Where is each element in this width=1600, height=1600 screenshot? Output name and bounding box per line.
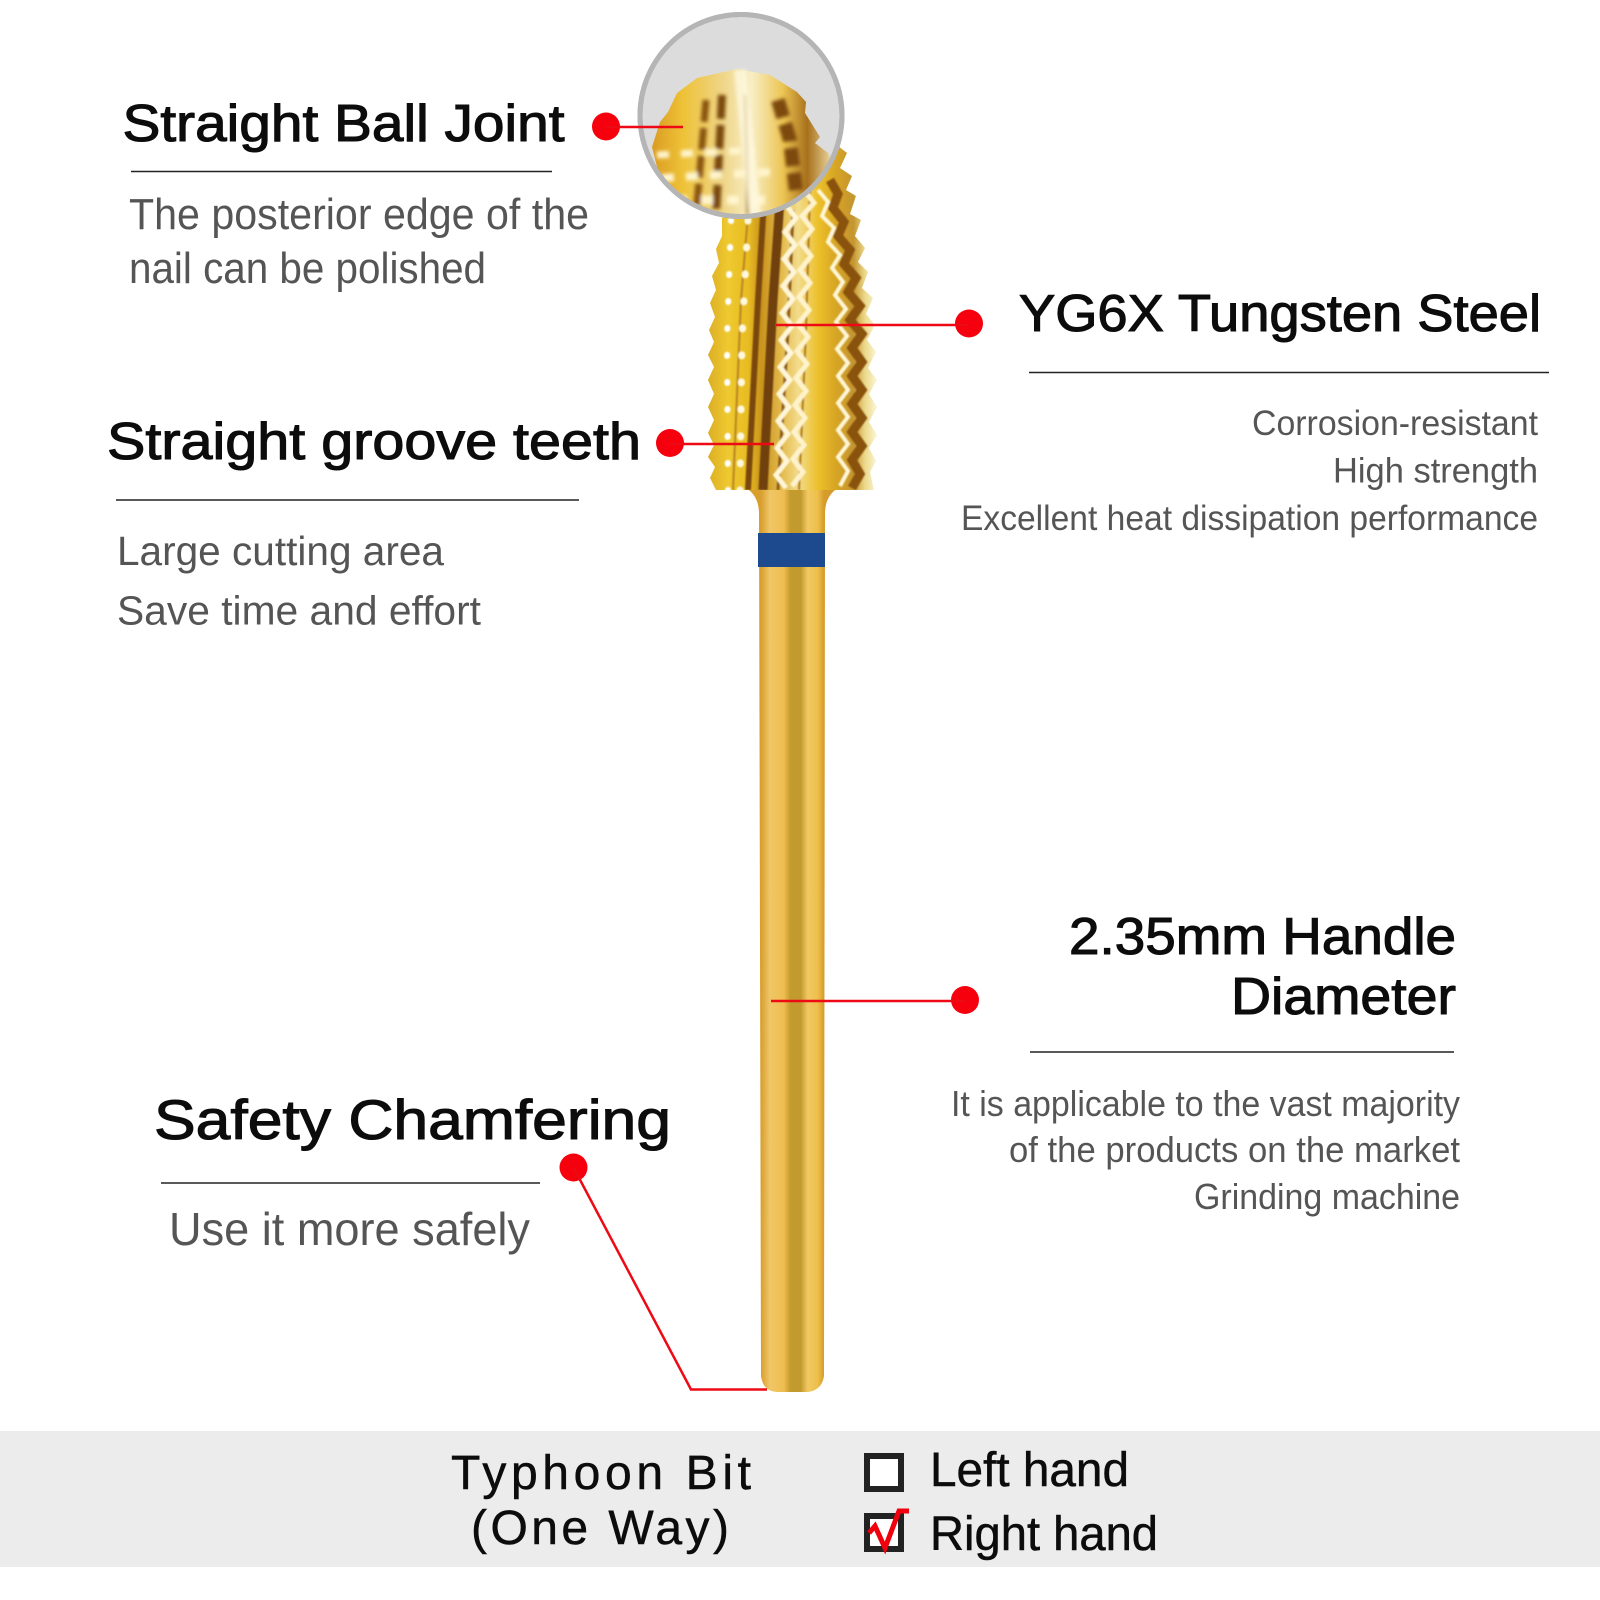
callout: YG6X Tungsten Steel: Excellent heat dissipation performance — [961, 499, 1538, 538]
heading: Safety Chamfering — [154, 1088, 671, 1151]
heading: 2.35mm Handle — [1069, 908, 1456, 966]
heading: Straight Ball Joint — [122, 95, 565, 153]
icon: empty checkbox — [867, 1456, 901, 1489]
leader — [560, 1154, 588, 1182]
cutting head — [700, 140, 880, 495]
product type label: Typhoon Bit — [451, 1447, 751, 1500]
description: It is applicable to the vast majority — [951, 1083, 1460, 1124]
callout: 2.35mm Handle Diameter — [771, 908, 1460, 1217]
callout: Straight groove teeth — [107, 413, 774, 634]
callout: YG6X Tungsten Steel: High strength — [1333, 452, 1538, 490]
bottom info band — [0, 1431, 1600, 1567]
description: The posterior edge of the — [129, 190, 589, 239]
callout: 2.35mm Handle Diameter: of the products on the market — [1009, 1129, 1460, 1170]
shaft — [746, 488, 838, 1392]
callout: Straight groove teeth: Save time and effort — [117, 588, 482, 634]
description: Large cutting area — [117, 528, 444, 574]
callout: 2.35mm Handle Diameter: Grinding machine — [1194, 1176, 1460, 1217]
heading: Straight groove teeth — [107, 413, 641, 471]
product type label: (One Way) — [471, 1502, 729, 1555]
leader — [955, 310, 983, 338]
blue ring — [758, 533, 825, 567]
magnifier: ball joint detail — [640, 14, 842, 225]
callout: Safety Chamfering — [154, 1088, 767, 1390]
leader — [951, 986, 979, 1014]
leader — [656, 429, 684, 457]
callout: Straight Ball Joint: nail can be polished — [129, 244, 486, 293]
nail drill bit — [700, 140, 880, 1392]
callout: 2.35mm Handle Diameter: Diameter — [1231, 968, 1456, 1026]
option: left hand: Left hand — [930, 1444, 1129, 1497]
leader — [592, 112, 620, 140]
product type label — [451, 1447, 751, 1555]
icon: checked checkbox — [867, 1511, 909, 1549]
description: Corrosion-resistant — [1252, 404, 1538, 443]
heading: YG6X Tungsten Steel — [1019, 285, 1541, 343]
description: Use it more safely — [169, 1203, 530, 1255]
callout: YG6X Tungsten Steel — [776, 285, 1549, 538]
option: right hand: Right hand — [930, 1508, 1158, 1561]
callout: Straight Ball Joint — [122, 95, 683, 293]
